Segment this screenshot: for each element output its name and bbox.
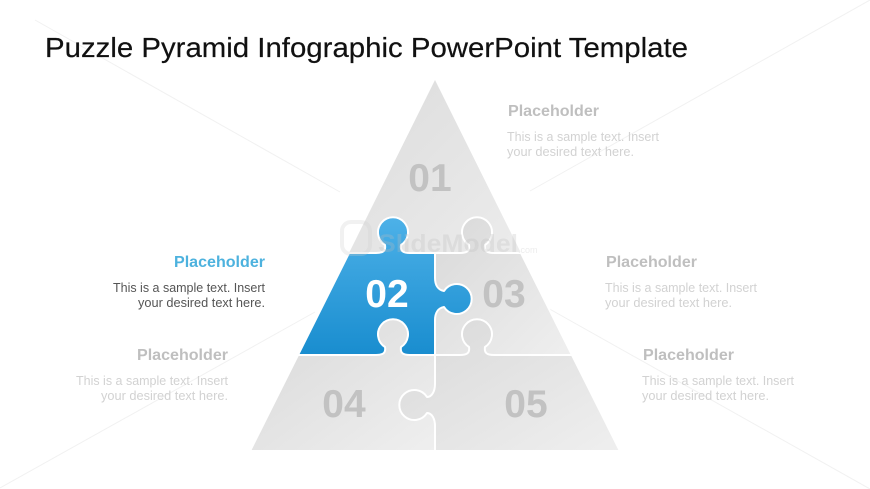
text block 03: This is a sample text. Insert	[605, 281, 757, 295]
text block 04	[76, 347, 228, 403]
text block 01: Placeholder	[508, 103, 599, 120]
text block 03: Placeholder	[606, 254, 697, 271]
text block 04: This is a sample text. Insert	[76, 374, 228, 388]
text block 02: This is a sample text. Insert	[113, 281, 265, 295]
text block 01: This is a sample text. Insert	[507, 130, 659, 144]
text block 05: your desired text here.	[642, 389, 769, 403]
puzzle pyramid	[250, 80, 620, 451]
title: Puzzle Pyramid Infographic PowerPoint Template	[45, 32, 688, 63]
text block 03: your desired text here.	[605, 296, 732, 310]
text block 05	[642, 347, 794, 403]
piece 03	[435, 217, 572, 355]
piece 02	[298, 217, 472, 355]
text block 03	[605, 254, 757, 310]
piece 01	[349, 80, 521, 253]
text block 05: Placeholder	[643, 347, 734, 364]
number 01: 01	[408, 157, 452, 200]
number 05: 05	[504, 383, 548, 426]
watermark	[342, 222, 538, 258]
text block 01: your desired text here.	[507, 145, 634, 159]
watermark: SlideModel	[378, 230, 518, 258]
piece 04	[250, 319, 435, 451]
text block 02	[113, 254, 265, 310]
number 03: 03	[482, 273, 526, 316]
watermark: .com	[518, 245, 538, 255]
number 04: 04	[322, 383, 366, 426]
text block 05: This is a sample text. Insert	[642, 374, 794, 388]
text block 02: Placeholder	[174, 254, 265, 271]
text block 02: your desired text here.	[138, 296, 265, 310]
text block 01	[507, 103, 659, 159]
text block 04: Placeholder	[137, 347, 228, 364]
text block 04: your desired text here.	[101, 389, 228, 403]
number 02: 02	[365, 273, 409, 316]
piece 05	[399, 319, 620, 451]
